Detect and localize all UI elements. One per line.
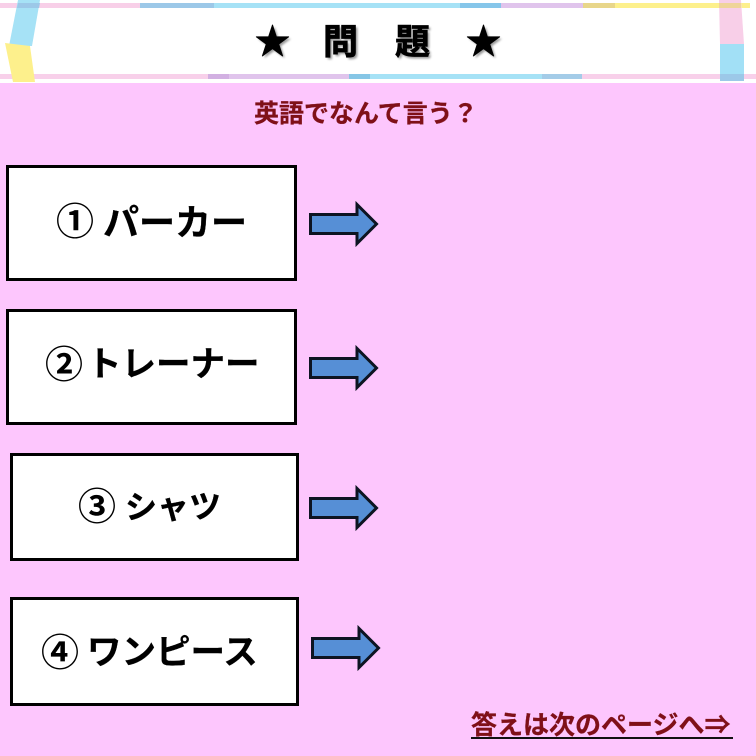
item 1: parka box bbox=[6, 165, 297, 281]
item 1: parka box: パーカー bbox=[103, 202, 247, 243]
arrow 3 bbox=[309, 485, 378, 531]
left ribbon fold bbox=[5, 0, 40, 82]
item 3: shirt box: シャツ bbox=[125, 489, 221, 525]
item 4: dress box: ④ bbox=[41, 633, 79, 675]
arrow 1 bbox=[309, 201, 378, 247]
item 2: trainer box bbox=[6, 309, 297, 425]
subtitle: 英語でなんて言う？ bbox=[254, 100, 478, 128]
item 1: parka box: ① bbox=[56, 202, 94, 244]
header banner bbox=[0, 0, 756, 83]
next page note: 答えは次のページへ⇒ bbox=[471, 710, 730, 740]
top decorative ribbon bbox=[0, 3, 750, 8]
title bbox=[255, 23, 502, 62]
bottom decorative ribbon bbox=[0, 74, 756, 79]
right ribbon fold bbox=[719, 0, 744, 81]
item 3: shirt box bbox=[10, 453, 299, 561]
arrow 4 bbox=[311, 625, 380, 671]
item 2: trainer box: ② bbox=[45, 345, 83, 387]
item 4: dress box: ワンピース bbox=[87, 634, 258, 672]
title: 問 bbox=[323, 23, 358, 62]
arrow 2 bbox=[309, 345, 378, 391]
item 3: shirt box: ③ bbox=[78, 487, 116, 529]
item 4: dress box bbox=[10, 597, 299, 706]
title: ★ bbox=[466, 23, 501, 62]
title: ★ bbox=[255, 23, 290, 62]
item 2: trainer box: トレーナー bbox=[87, 346, 260, 384]
title: 題 bbox=[395, 23, 430, 62]
